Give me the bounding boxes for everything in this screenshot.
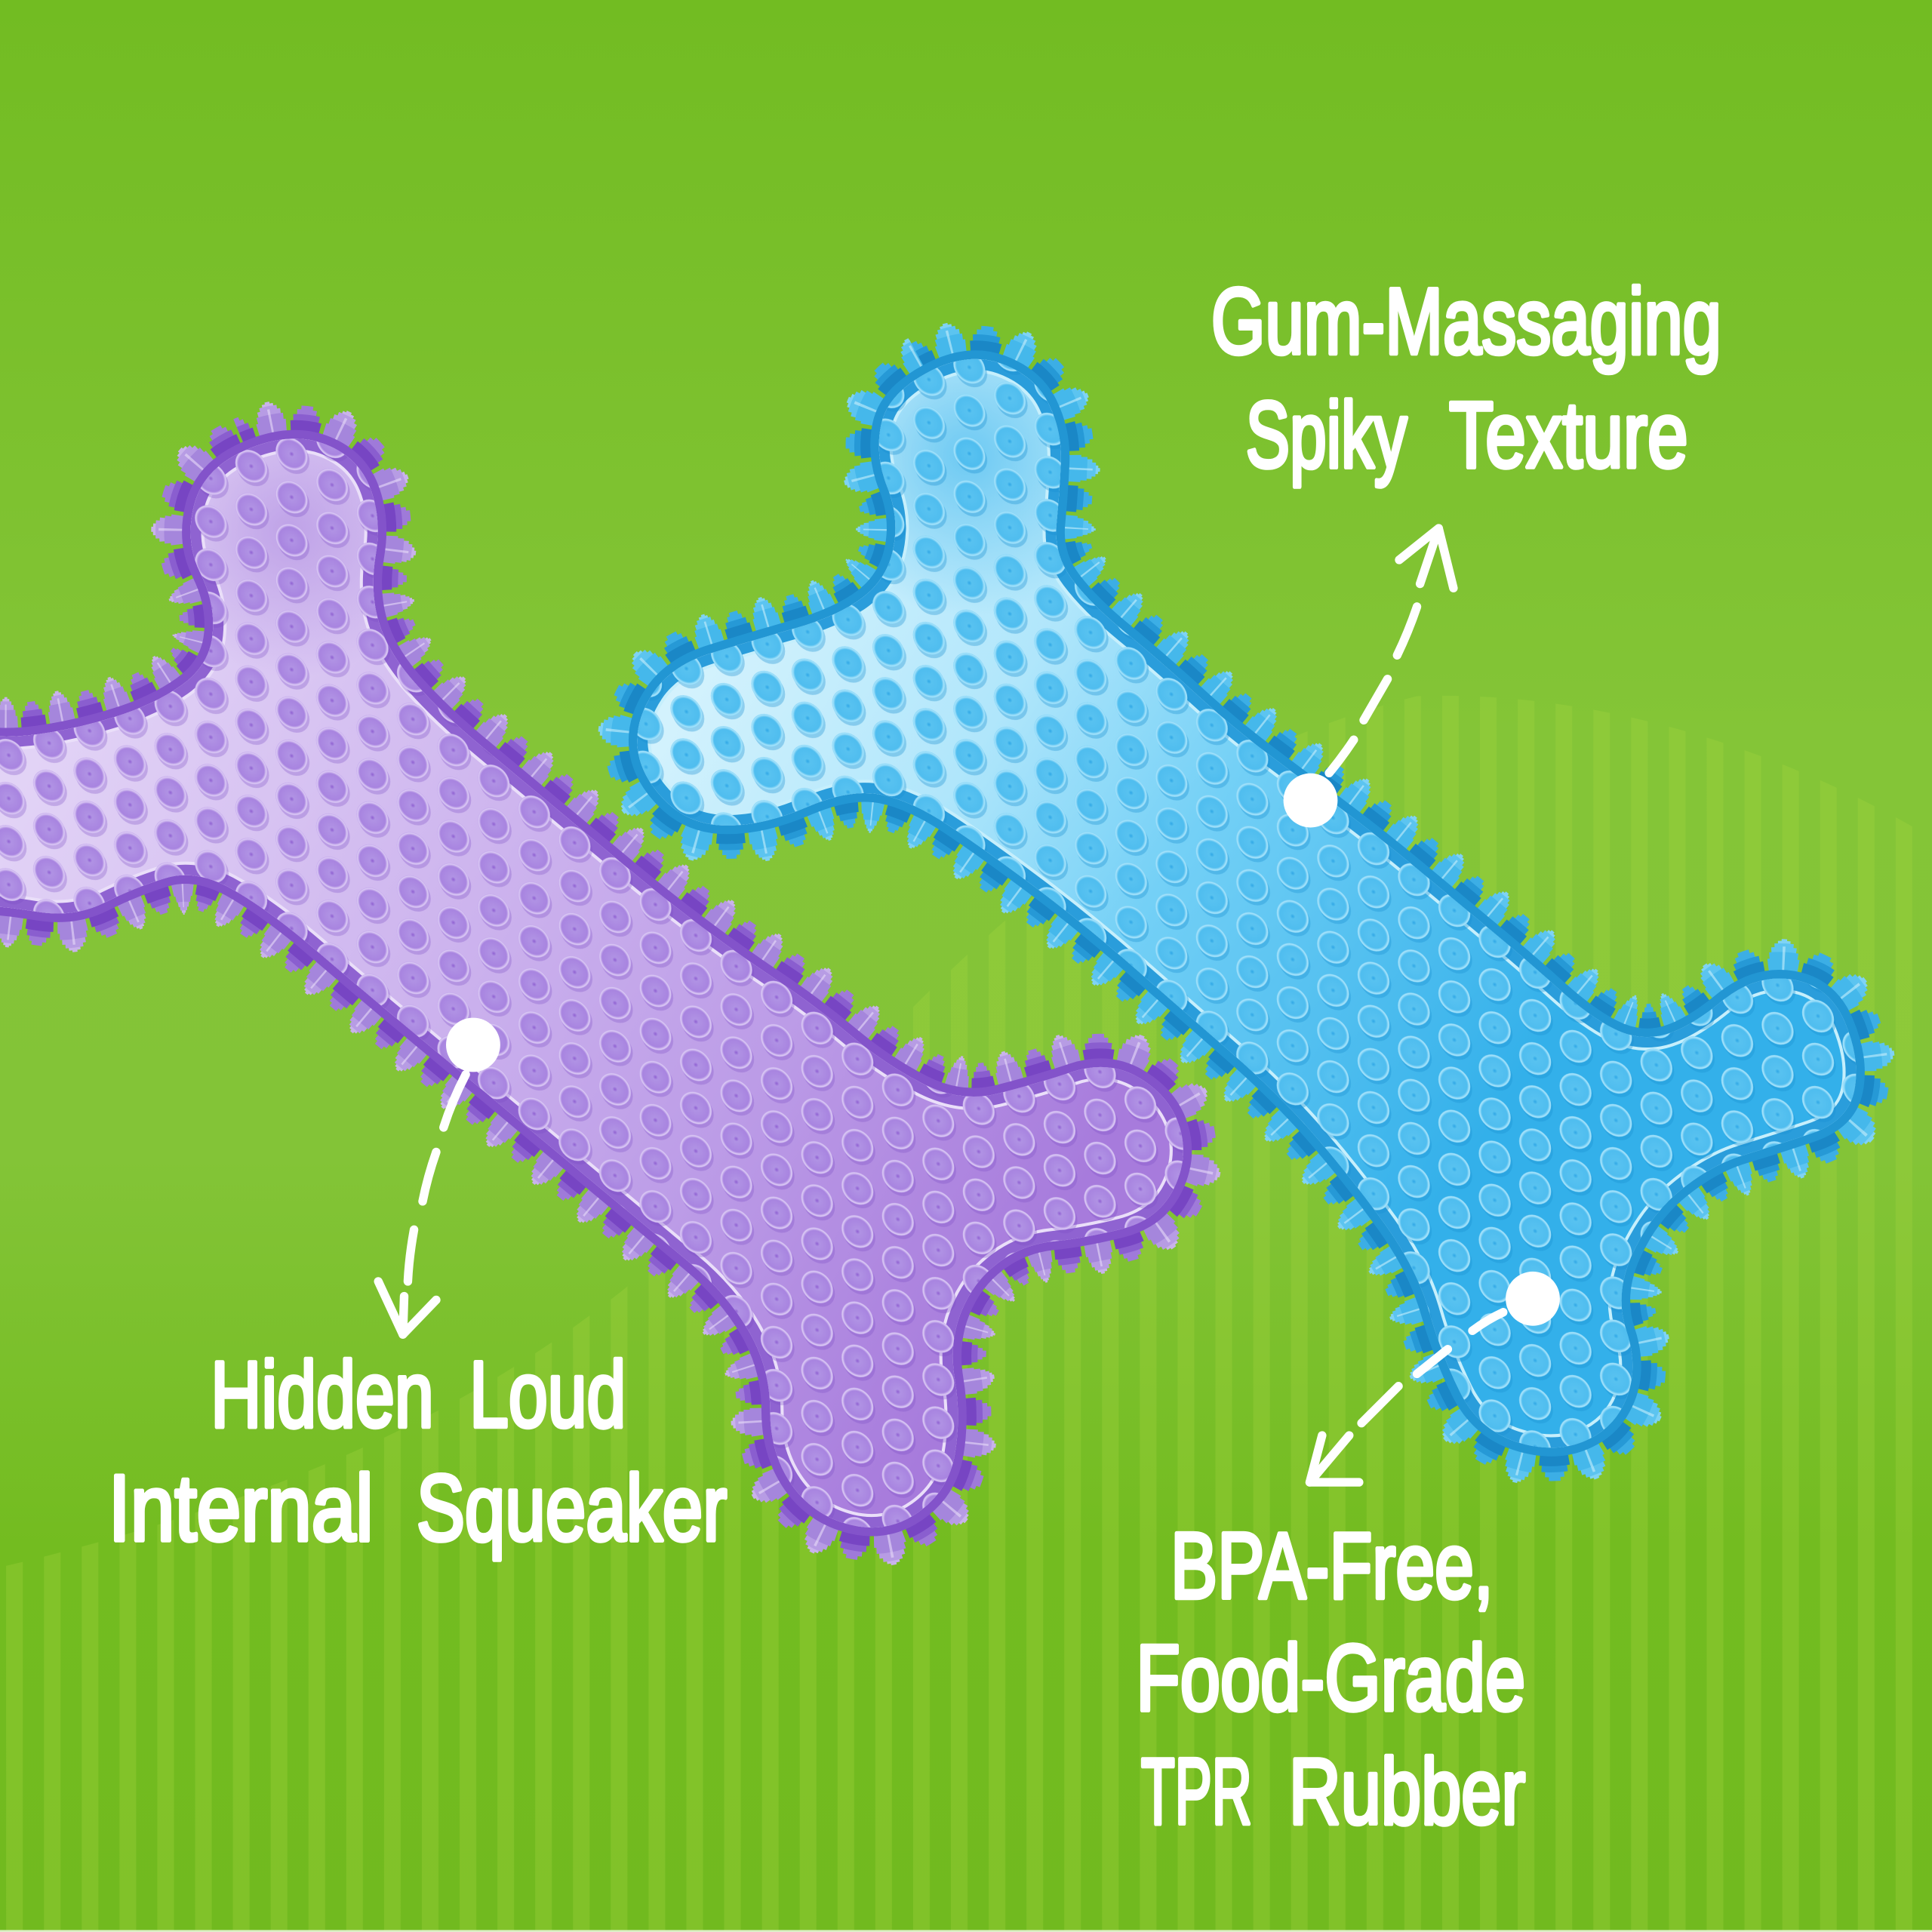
dashed arrow to label [1310,1312,1503,1482]
callout dot [1284,774,1337,827]
callout dot [446,1018,500,1072]
label line 2: Food-Grade [1136,1626,1525,1730]
label line 1: Loud [469,1343,626,1447]
label line 3: TPR [1141,1740,1252,1844]
label line 2 [109,1457,727,1561]
dashed arrow up to label [1329,528,1454,773]
purple spiky toy [0,382,1183,1527]
label line 3 [1141,1740,1525,1844]
callout: gum-massaging texture [1211,270,1721,827]
label line 2: Spiky [1246,383,1407,488]
blue toy body with bumps [637,296,1856,1447]
label line 2: Internal [109,1457,374,1561]
label line 1: Gum-Massaging [1211,270,1721,374]
dashed arrow down to label [378,1075,466,1334]
label line 1: Hidden [211,1343,434,1447]
callout: BPA-free rubber [1136,1272,1560,1844]
label line 2 [1246,383,1688,488]
purple toy body with bumps [0,382,1183,1527]
label line 2: Texture [1449,383,1688,488]
callout: hidden squeaker [109,1018,727,1561]
bottom edge line [0,1930,1932,1932]
background striped hill [0,666,1932,1932]
blue toy spikes [637,359,1856,1447]
label line 3: Rubber [1289,1740,1525,1844]
callout dot [1506,1272,1560,1326]
purple toy spikes [0,438,1183,1527]
label line 2: Squeaker [417,1457,727,1561]
blue spiky toy [637,296,1856,1447]
label line 1: BPA-Free, [1171,1515,1494,1619]
